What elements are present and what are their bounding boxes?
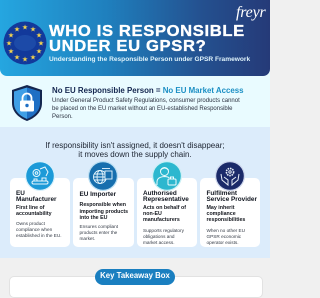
- panel: header banner: [0, 0, 270, 76]
- card: EU Manufacturer: Manufacturer: [16, 196, 56, 203]
- icon: EU flag globe: ★: [37, 39, 44, 47]
- panel: alert background: [0, 0, 270, 127]
- icon: EU flag globe: ★: [13, 53, 20, 61]
- card: EU Importer: Ensures compliant: [80, 224, 118, 229]
- card: EU Importer: [73, 178, 134, 247]
- icon: EU flag globe: ★: [7, 47, 14, 55]
- title: WHO IS RESPONSIBLE: [49, 23, 245, 40]
- icon: EU flag globe: ★: [13, 25, 20, 33]
- icon: fulfilment hands and gear: [215, 161, 245, 191]
- card: Fulfilment Service Provider: Service Provider: [206, 196, 257, 203]
- alert body text: Under General Product Safety Regulations, consumer products cannot: [52, 98, 240, 104]
- logo: freyr: freyr: [236, 4, 266, 21]
- card: Authorised Representative: manufacturers: [143, 217, 180, 223]
- card: EU Manufacturer: Owns product: [16, 221, 45, 226]
- icon: EU flag globe: ★: [21, 23, 28, 31]
- card: Fulfilment Service Provider: [200, 178, 260, 247]
- heading: key takeaway pill: [95, 269, 175, 285]
- card: Authorised Representative: obligations and: [143, 234, 175, 239]
- alert body text: Person.: [52, 114, 73, 120]
- card: Fulfilment Service Provider: operator exists.: [206, 240, 239, 245]
- card: EU Manufacturer: EU: [16, 190, 25, 197]
- card: Authorised Representative: Supports regulatory: [143, 228, 184, 232]
- supply chain statement: it moves down the supply chain.: [78, 150, 192, 159]
- card: Authorised Representative: Acts on behalf of: [143, 205, 186, 211]
- card: Fulfilment Service Provider: responsibilities: [206, 217, 245, 223]
- card: EU Importer: market.: [80, 236, 95, 241]
- card: EU Importer: into the EU: [80, 215, 107, 221]
- card: Authorised Representative: Representative: [143, 196, 189, 203]
- icon: EU flag globe: [4, 22, 46, 64]
- card: EU Importer: EU Importer: [80, 191, 116, 198]
- heading: key takeaway pill: Key Takeaway Box: [100, 271, 170, 280]
- supply chain statement: [45, 140, 225, 159]
- supply chain statement: If responsibility isn't assigned, it doesn't disappear;: [45, 140, 225, 150]
- panel: key takeaway box: [9, 276, 263, 298]
- card: Fulfilment Service Provider: Fulfilment: [206, 190, 237, 197]
- alert heading: No EU Responsible Person = No EU Market Access: [52, 86, 244, 95]
- icon: EU flag globe: ★: [21, 55, 28, 63]
- icon: EU flag globe: ★: [35, 31, 42, 39]
- icon: representative person with briefcase: [152, 161, 182, 191]
- card: Authorised Representative: Authorised: [143, 190, 177, 197]
- alert body text: be placed on the EU market without an EU-established Responsible: [52, 106, 232, 112]
- alert body text: [52, 98, 240, 120]
- icon: shield with padlock: [12, 85, 42, 121]
- card: Fulfilment Service Provider: When no other EU: [206, 228, 245, 232]
- card: Authorised Representative: non-EU: [143, 211, 162, 217]
- title: UNDER EU GPSR?: [49, 38, 206, 55]
- subtitle: Understanding the Responsible Person under GPSR Framework: [49, 56, 250, 62]
- icon: EU flag globe: ★: [29, 53, 36, 61]
- card: EU Manufacturer: [10, 178, 70, 247]
- card: Fulfilment Service Provider: compliance: [206, 211, 236, 217]
- icon: EU flag globe: ★: [7, 31, 14, 39]
- title: [48, 23, 245, 55]
- card: EU Manufacturer: established in the EU.: [16, 233, 62, 238]
- card: EU Importer: Responsible when: [80, 202, 126, 208]
- icon: EU flag globe: ★: [35, 47, 42, 55]
- card: EU Manufacturer: accountability: [16, 211, 52, 217]
- card: EU Manufacturer: First line of: [16, 205, 45, 211]
- card: EU Importer: products enter the: [80, 230, 117, 235]
- card: EU Manufacturer: compliance when: [16, 227, 52, 232]
- panel: supply chain background: [0, 127, 270, 258]
- card: EU Importer: importing products: [80, 208, 128, 214]
- card: Authorised Representative: market access.: [143, 240, 175, 245]
- icon: EU flag globe: ★: [5, 39, 12, 47]
- card: Authorised Representative: [137, 178, 197, 247]
- icon: EU flag globe: ★: [29, 25, 36, 33]
- card: Fulfilment Service Provider: GPSR economic: [206, 234, 241, 239]
- icon: manufacturer robot arm: [25, 162, 55, 191]
- card: Fulfilment Service Provider: May inherit: [206, 205, 234, 211]
- icon: importer globe and box: [88, 161, 118, 191]
